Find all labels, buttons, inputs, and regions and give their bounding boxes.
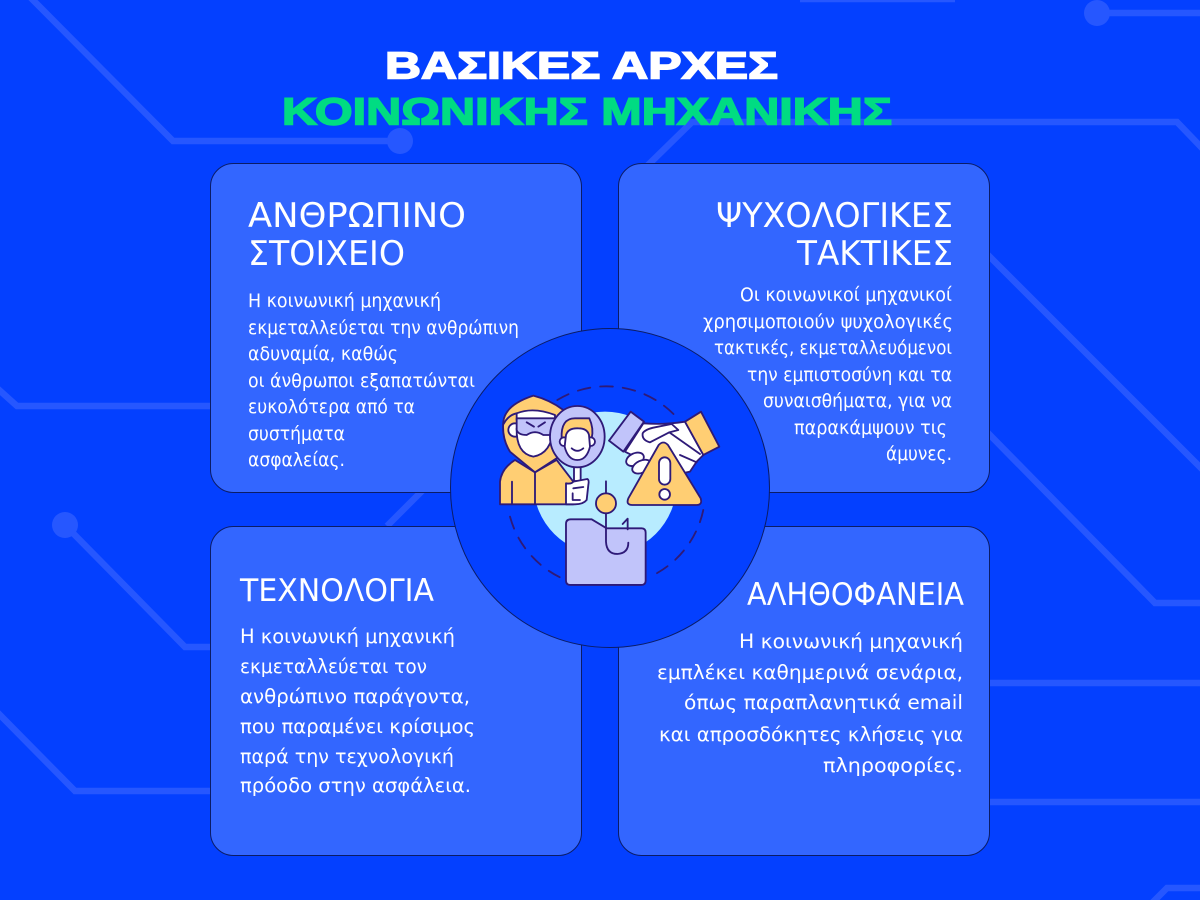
panel: psychological tactics [618, 164, 990, 492]
text: technology: πρόοδο στην ασφάλεια. [240, 774, 471, 797]
text: psychological tactics: χρησιμοποιούν ψυχολογικές [703, 312, 953, 333]
text: plausibility: εμπλέκει καθημερινά σενάρια, [657, 661, 963, 684]
text: psychological tactics: Οι κοινωνικοί μηχανικοί [740, 285, 952, 306]
text: human element [248, 291, 519, 471]
text: human element: οι άνθρωποι εξαπατώνται [248, 371, 475, 392]
icon: social engineering illustration [500, 386, 719, 585]
title: ΚΟΙΝΩΝΙΚΗΣ ΜΗΧΑΝΙΚΗΣ [282, 92, 892, 134]
panel: technology [210, 526, 582, 856]
panel: human element [210, 164, 582, 492]
panel: plausibility [618, 526, 990, 856]
icon: hooded hacker with magnifier [500, 396, 605, 504]
text: plausibility: όπως παραπλανητικά email [684, 691, 963, 714]
text: technology [240, 625, 475, 797]
text: technology: Η κοινωνική μηχανική [240, 625, 455, 648]
text: technology: εκμεταλλεύεται τον [240, 655, 427, 678]
heading: technology: ΤΕΧΝΟΛΟΓΙΑ [239, 573, 434, 609]
heading: psychological tactics: ΤΑΚΤΙΚΕΣ [796, 234, 953, 274]
text: psychological tactics [703, 285, 953, 465]
text: psychological tactics: τακτικές, εκμεταλλευόμενοι [714, 338, 952, 359]
heading: human element: ΑΝΘΡΩΠΙΝΟ [248, 196, 466, 236]
text: plausibility: Η κοινωνική μηχανική [739, 630, 963, 653]
text: psychological tactics: την εμπιστοσύνη και τα [747, 365, 952, 386]
heading: human element [248, 196, 466, 274]
text: psychological tactics: άμυνες. [886, 444, 952, 465]
heading: psychological tactics [716, 196, 953, 274]
text: human element: συστήματα [248, 424, 345, 445]
text: human element: αδυναμία, καθώς [248, 344, 398, 365]
text: human element: ευκολότερα από τα [248, 397, 415, 418]
text: plausibility [657, 630, 963, 777]
center circle [450, 328, 770, 648]
heading: plausibility: ΑΛΗΘΟΦΑΝΕΙΑ [747, 577, 964, 613]
text: psychological tactics: παρακάμψουν τις [794, 418, 947, 439]
icon: handshake and warning triangle [609, 412, 719, 505]
icon: phishing hook and folder [566, 481, 646, 585]
text: human element: εκμεταλλεύεται την ανθρώπινη [248, 318, 519, 339]
heading: human element: ΣΤΟΙΧΕΙΟ [248, 234, 405, 274]
text: human element: ασφαλείας. [248, 450, 345, 471]
text: technology: ανθρώπινο παράγοντα, [240, 685, 470, 708]
text: human element: Η κοινωνική μηχανική [248, 291, 441, 312]
title [282, 46, 892, 134]
heading: psychological tactics: ΨΥΧΟΛΟΓΙΚΕΣ [716, 196, 953, 236]
title: ΒΑΣΙΚΕΣ ΑΡΧΕΣ [385, 46, 778, 88]
text: technology: παρά την τεχνολογική [240, 745, 454, 768]
text: plausibility: και απροσδόκητες κλήσεις για [659, 723, 963, 746]
text: plausibility: πληροφορίες. [823, 754, 963, 777]
text: psychological tactics: συναισθήματα, για να [763, 391, 952, 412]
text: technology: που παραμένει κρίσιμος [240, 715, 475, 738]
